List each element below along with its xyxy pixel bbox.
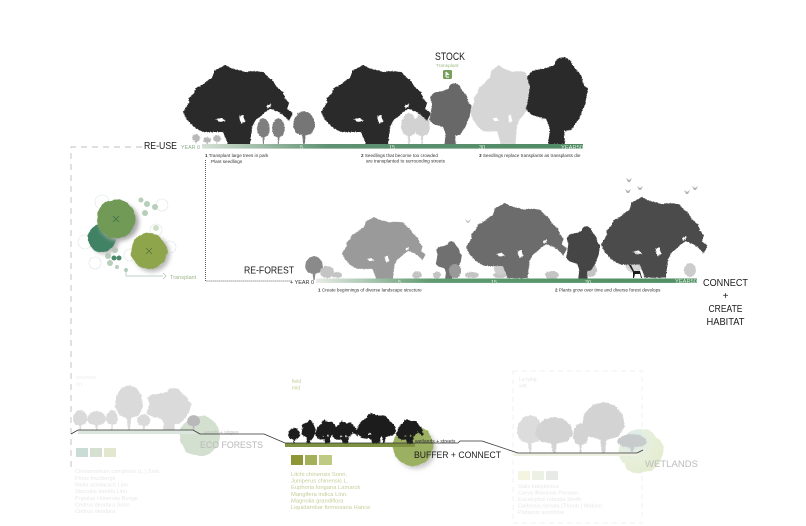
elevation labels: wet	[519, 384, 527, 390]
timeline labels: YEAR 0	[181, 145, 200, 151]
tree: dark middle tree	[566, 226, 600, 279]
step notes: Plant seedlings	[211, 159, 243, 164]
planting circles	[78, 195, 176, 269]
habitat blob	[180, 416, 220, 456]
heading: connect + create habitat	[703, 278, 748, 328]
elevation labels	[519, 377, 537, 390]
swatches	[518, 471, 558, 480]
step notes: 2 Plants grow over time and diverse forest develops	[555, 288, 661, 292]
habitat blob	[619, 429, 663, 473]
species list	[291, 472, 370, 511]
species list: Cedrus deodara	[75, 509, 116, 515]
heading: re-use: RE-USE	[144, 141, 177, 152]
sub label: woods + slopes	[204, 430, 239, 436]
terrain section line	[71, 430, 643, 453]
species list: Sterculia foetida Linn.	[75, 489, 129, 495]
tree: light transplants behind	[401, 113, 430, 144]
small shrubs	[105, 198, 159, 272]
faded tree row	[73, 385, 192, 431]
species list: Pinus thunbergii	[75, 476, 115, 482]
tree: small sapling	[305, 256, 323, 280]
species list: Liquidambar formosana Hance	[291, 505, 370, 511]
species list: Melia azedarach Linn.	[75, 482, 130, 488]
species list: Mangifera indica Linn.	[291, 492, 348, 498]
heading: connect + create habitat: CREATE	[708, 304, 743, 315]
heading: connect + create habitat: HABITAT	[706, 317, 744, 328]
dark tree row	[288, 413, 424, 444]
ground strip	[514, 453, 639, 456]
sub label: wetlands + streets	[415, 439, 456, 445]
tree: grey transplant	[429, 83, 472, 145]
dashed frame	[513, 371, 642, 523]
elevation labels: field	[292, 379, 301, 385]
undergrowth shrubs	[320, 251, 696, 279]
transplant tag with icon	[436, 63, 459, 79]
species list: Eucalyptus robusta Smith	[518, 497, 581, 503]
connector: dashed site outline	[71, 147, 142, 470]
tree: grey young tree	[436, 241, 462, 279]
step notes: 1 Create beginnings of diverse landscape structure	[318, 288, 422, 292]
tree: dark replacement	[526, 57, 588, 144]
heading: re-forest: RE-FOREST	[244, 266, 294, 276]
elevation labels	[292, 379, 301, 392]
tree: dark mature canopy	[601, 197, 708, 278]
heading: connect + create habitat: +	[723, 291, 729, 302]
heading: eco forests: ECO FORESTS	[200, 440, 263, 451]
faded tree row	[517, 402, 647, 453]
panel: re-use timeline	[144, 51, 588, 164]
step notes: are transplanted to surrounding streets	[366, 158, 446, 164]
tree canopy: olive	[131, 233, 170, 272]
heading: buffer + connect: BUFFER + CONNECT	[414, 450, 501, 461]
panel: buffer and connect	[285, 379, 501, 511]
species list: Juniperus chinensis L.	[291, 479, 349, 485]
timeline labels: 30	[479, 145, 485, 151]
swatches	[291, 455, 332, 465]
seedlings	[257, 111, 315, 144]
panel: wetlands	[513, 371, 698, 523]
timeline bar	[202, 144, 583, 149]
species list: Cinnamomum camphora (L.) Sieb.	[75, 469, 161, 475]
elevation labels: dry	[76, 382, 83, 388]
icon: deer	[629, 265, 642, 278]
species list	[518, 484, 602, 516]
elevation labels: Lo-lying	[519, 377, 537, 383]
tree: grey mature canopy	[466, 203, 567, 278]
timeline bar	[316, 278, 697, 283]
step notes	[205, 153, 581, 164]
ground strip	[78, 430, 196, 434]
tree: light large canopy fading	[470, 65, 545, 144]
arrow: transplant: Transplant	[170, 275, 197, 281]
elevation labels	[76, 375, 97, 388]
ground strip	[285, 443, 415, 447]
habitat blob	[393, 426, 436, 469]
panel: re-forest timeline	[244, 178, 708, 292]
timeline labels: + YEAR 0	[290, 280, 314, 286]
heading: wetlands: WETLANDS	[645, 459, 698, 470]
swatches	[76, 448, 116, 457]
species list: Salix babylonica	[518, 484, 559, 490]
tree canopy: mid green	[96, 200, 139, 241]
icon: birds	[465, 178, 698, 223]
timeline labels: YEAR50	[561, 145, 583, 151]
elevation labels: mountain	[76, 375, 97, 381]
timeline labels	[290, 279, 697, 286]
step notes: 3 Seedlings replace transplants as transplants die	[479, 153, 581, 158]
species list: Litchi chinensis Sonn.	[291, 472, 347, 478]
heading: stock: STOCK	[435, 51, 466, 63]
species list: Carbonia ramata (Thunb.) Makino	[518, 504, 602, 510]
species list: Magnolia grandiflora	[291, 498, 344, 504]
timeline labels: 15	[389, 145, 395, 151]
step notes	[318, 288, 661, 292]
step notes: 2 Seedlings that become too crowded	[361, 153, 438, 158]
tree: light large canopy	[342, 217, 426, 279]
transplant tag with icon: Transplant	[436, 63, 459, 69]
timeline labels: YEAR50	[675, 279, 697, 285]
connector: dotted line between timelines	[206, 160, 292, 281]
species list: Carya illinoinsis Pecawn	[518, 490, 578, 496]
timeline labels: 15	[491, 280, 497, 286]
step notes: 1 Transplant large trees in park	[205, 153, 269, 158]
species list: Populus chinensis Bunge	[75, 496, 138, 502]
timeline labels: 5	[300, 145, 303, 151]
shrubs at year 0	[192, 134, 221, 144]
tree: large canopy with crowded seedlings	[321, 65, 431, 145]
timeline labels: 5	[398, 280, 401, 286]
species list: Cedrus deodara Sonn.	[75, 502, 132, 508]
species list: Platanus acerifolia	[518, 510, 565, 516]
panel: eco forests	[73, 375, 263, 515]
tree on blob	[187, 415, 200, 430]
timeline labels	[181, 145, 583, 151]
heading: connect + create habitat: CONNECT	[703, 278, 748, 289]
species list: Euphoria longana Lamarck	[291, 485, 360, 491]
panel: plan view of trees	[78, 195, 197, 281]
timeline labels: 30	[585, 280, 591, 286]
species list	[75, 469, 161, 515]
elevation labels: mid	[292, 386, 300, 392]
tree canopy: dark green	[88, 224, 119, 254]
tree: large canopy at year 0	[183, 65, 293, 145]
